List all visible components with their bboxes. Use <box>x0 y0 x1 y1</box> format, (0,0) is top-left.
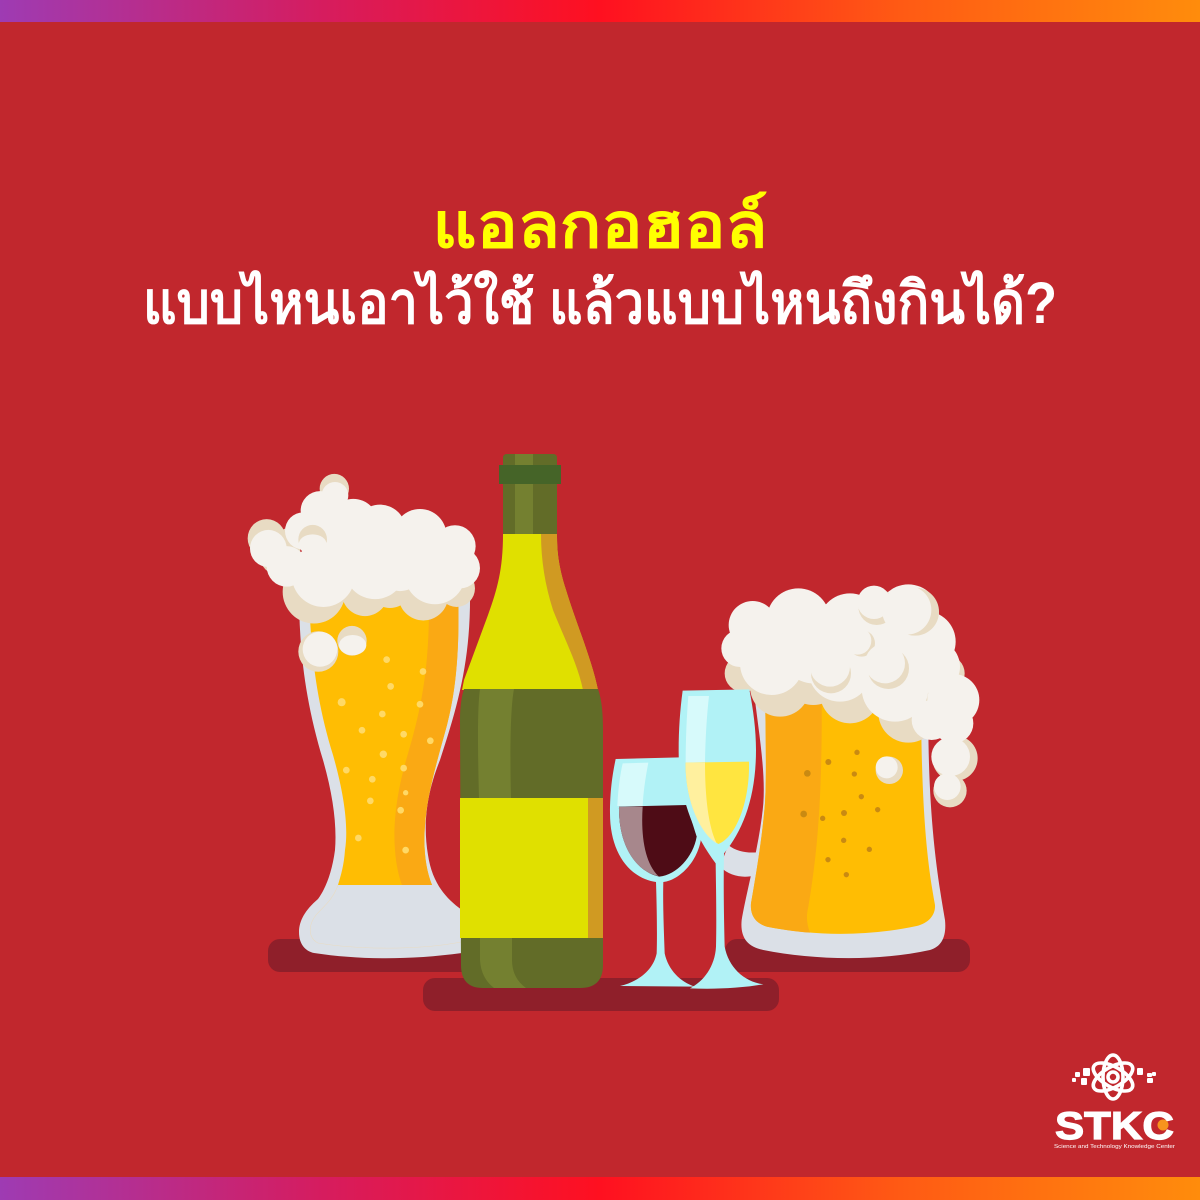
glass base line detail <box>310 885 461 948</box>
neck highlight <box>515 454 533 534</box>
mug beer <box>751 687 935 934</box>
flute highlight <box>686 696 709 763</box>
shoulder shade <box>541 534 598 690</box>
title line 1: แอลกอฮอล์ <box>432 191 768 261</box>
logo atom icon <box>1089 1055 1137 1099</box>
foam crescents <box>810 585 939 693</box>
wine glass highlight <box>617 763 648 806</box>
bottle neck <box>503 454 557 534</box>
logo: STKC <box>1054 1055 1175 1150</box>
mug beer shade <box>751 687 822 933</box>
sparkling wine <box>686 762 749 844</box>
label <box>460 798 603 938</box>
logo orange dot <box>1158 1120 1168 1130</box>
foam <box>248 474 480 672</box>
table shadows <box>268 939 970 1011</box>
bottle shoulder <box>462 534 598 690</box>
champagne flute <box>679 689 763 989</box>
red wine <box>619 805 697 877</box>
logo wordmark: STKC <box>1055 1105 1174 1148</box>
label shade <box>588 798 603 938</box>
sparkling reflection <box>686 763 717 843</box>
mug foam <box>721 584 979 807</box>
beer pilsner glass <box>248 474 480 958</box>
logo tagline: Science and Technology Knowledge Center <box>1054 1144 1175 1150</box>
illustration: drinks <box>248 454 979 1011</box>
lower highlight <box>480 938 526 988</box>
top gradient bar <box>0 0 1200 22</box>
title <box>143 191 1057 336</box>
beer bubbles <box>338 656 434 854</box>
beer shade <box>394 585 459 885</box>
bottom gradient bar <box>0 1177 1200 1200</box>
mug handle <box>720 845 763 877</box>
beer liquid <box>309 585 459 885</box>
beer mug <box>720 584 979 958</box>
glass body <box>299 590 470 958</box>
body highlights <box>478 689 514 798</box>
wine glass <box>610 757 702 987</box>
bottle body <box>460 689 603 988</box>
neck band <box>499 465 561 484</box>
wine glass body <box>610 757 702 987</box>
wine reflection <box>619 807 658 876</box>
mug glass <box>741 687 945 958</box>
logo side dots <box>1072 1068 1156 1085</box>
flute body <box>679 689 763 989</box>
mug bubbles <box>800 750 880 877</box>
wine bottle <box>460 454 603 988</box>
title line 2: แบบไหนเอาไว้ใช้ แล้วแบบไหนถึงกินได้? <box>143 269 1057 336</box>
